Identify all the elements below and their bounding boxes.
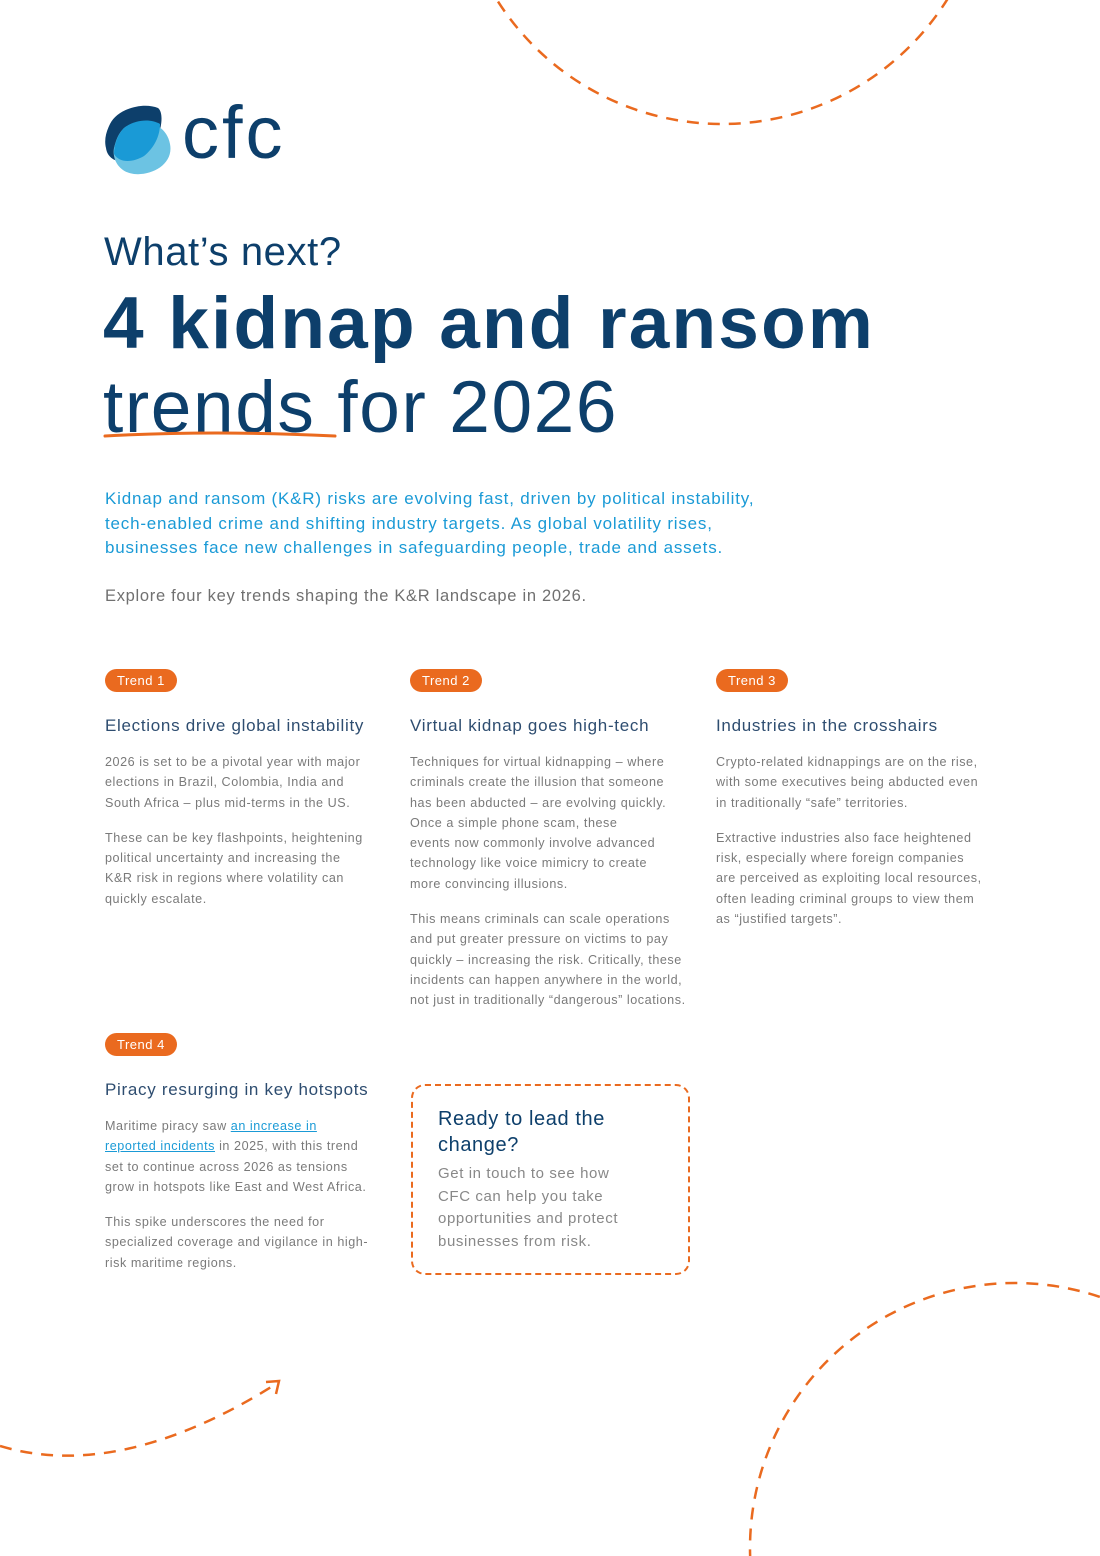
trend 3: in traditionally “safe” territories. xyxy=(716,796,908,810)
intro text: tech-enabled crime and shifting industry targets. As global volatility rises, xyxy=(105,514,713,532)
callout: ready to lead the change: businesses from risk. xyxy=(438,1232,591,1250)
explore text: Explore four key trends shaping the K&R landscape in 2026. xyxy=(105,587,587,605)
trend 2: has been abducted – are evolving quickly. xyxy=(410,796,666,810)
trend 2: technology like voice mimicry to create xyxy=(410,856,647,870)
trend 2 xyxy=(410,669,686,1007)
trend 2: quickly – increasing the risk. Critically, these xyxy=(410,953,682,967)
trend 4: This spike underscores the need for xyxy=(105,1215,324,1229)
trend 4: grow in hotspots like East and West Africa. xyxy=(105,1180,366,1194)
trend 2: Virtual kidnap goes high-tech xyxy=(410,716,649,735)
trend 1: political uncertainty and increasing the xyxy=(105,851,341,865)
title: 4 kidnap and ransom xyxy=(103,283,875,364)
trend 3: Crypto-related kidnappings are on the rise, xyxy=(716,755,978,769)
arrow: dashed curve bottom-left xyxy=(0,1380,281,1457)
logo xyxy=(105,91,286,174)
trend 3: Trend 3 xyxy=(728,673,776,688)
trend 3: are perceived as exploiting local resources, xyxy=(716,871,982,885)
callout: ready to lead the change: Ready to lead the change? xyxy=(438,1108,605,1156)
trend 4: specialized coverage and vigilance in high- xyxy=(105,1235,368,1249)
intro text: businesses face new challenges in safeguarding people, trade and assets. xyxy=(105,538,723,557)
trend 2: Techniques for virtual kidnapping – where xyxy=(410,755,664,769)
trend 2: more convincing illusions. xyxy=(410,877,568,891)
trend 4 xyxy=(105,1033,368,1270)
trend 3: risk, especially where foreign companies xyxy=(716,851,964,865)
title xyxy=(103,283,875,448)
callout: ready to lead the change: Get in touch to see how xyxy=(438,1165,609,1182)
trend 3: Extractive industries also face heightened xyxy=(716,831,972,845)
trend 1: South Africa – plus mid-terms in the US. xyxy=(105,796,350,810)
intro text: Kidnap and ransom (K&R) risks are evolving fast, driven by political instability, xyxy=(105,489,754,508)
trend 2: Once a simple phone scam, these xyxy=(410,816,617,830)
subtitle: What’s next? xyxy=(104,230,342,274)
trend 3: Industries in the crosshairs xyxy=(716,716,938,735)
trend 4: Trend 4 xyxy=(117,1037,165,1052)
trend 2: not just in traditionally “dangerous” locations. xyxy=(410,993,686,1007)
trend 4: set to continue across 2026 as tensions xyxy=(105,1160,348,1174)
callout: ready to lead the change: CFC can help you take xyxy=(438,1188,603,1204)
underline xyxy=(104,432,336,438)
trend 3: with some executives being abducted even xyxy=(716,775,978,789)
trend 3: as “justified targets”. xyxy=(716,912,842,926)
callout: ready to lead the change xyxy=(411,1084,690,1275)
trend 1: 2026 is set to be a pivotal year with major xyxy=(105,755,360,769)
trend 2: and put greater pressure on victims to pay xyxy=(410,932,668,946)
trend 4: Piracy resurging in key hotspots xyxy=(105,1080,368,1099)
title: trends for 2026 xyxy=(103,367,618,448)
trend 3 xyxy=(716,669,982,926)
trend 3: often leading criminal groups to view them xyxy=(716,892,974,906)
trend 4: Maritime piracy saw an increase in xyxy=(105,1119,317,1133)
trend 4: risk maritime regions. xyxy=(105,1256,237,1270)
logo: cfc xyxy=(182,91,286,174)
trend 1: Elections drive global instability xyxy=(105,716,364,735)
trend 4: reported incidents in 2025, with this trend xyxy=(105,1139,358,1153)
trend 2: incidents can happen anywhere in the world, xyxy=(410,973,682,987)
trend 1: Trend 1 xyxy=(117,673,165,688)
trend 1: These can be key flashpoints, heightening xyxy=(105,831,363,845)
callout: ready to lead the change: opportunities and protect xyxy=(438,1210,618,1227)
trend 2: criminals create the illusion that someone xyxy=(410,775,664,789)
trend 1: K&R risk in regions where volatility can xyxy=(105,871,344,885)
trend 1: elections in Brazil, Colombia, India and xyxy=(105,775,344,789)
intro text xyxy=(105,489,754,557)
trend 2: events now commonly involve advanced xyxy=(410,836,655,850)
trend 2: This means criminals can scale operations xyxy=(410,912,670,926)
trend 1 xyxy=(105,669,364,906)
trend 1: quickly escalate. xyxy=(105,892,207,906)
trend 2: Trend 2 xyxy=(422,673,470,688)
